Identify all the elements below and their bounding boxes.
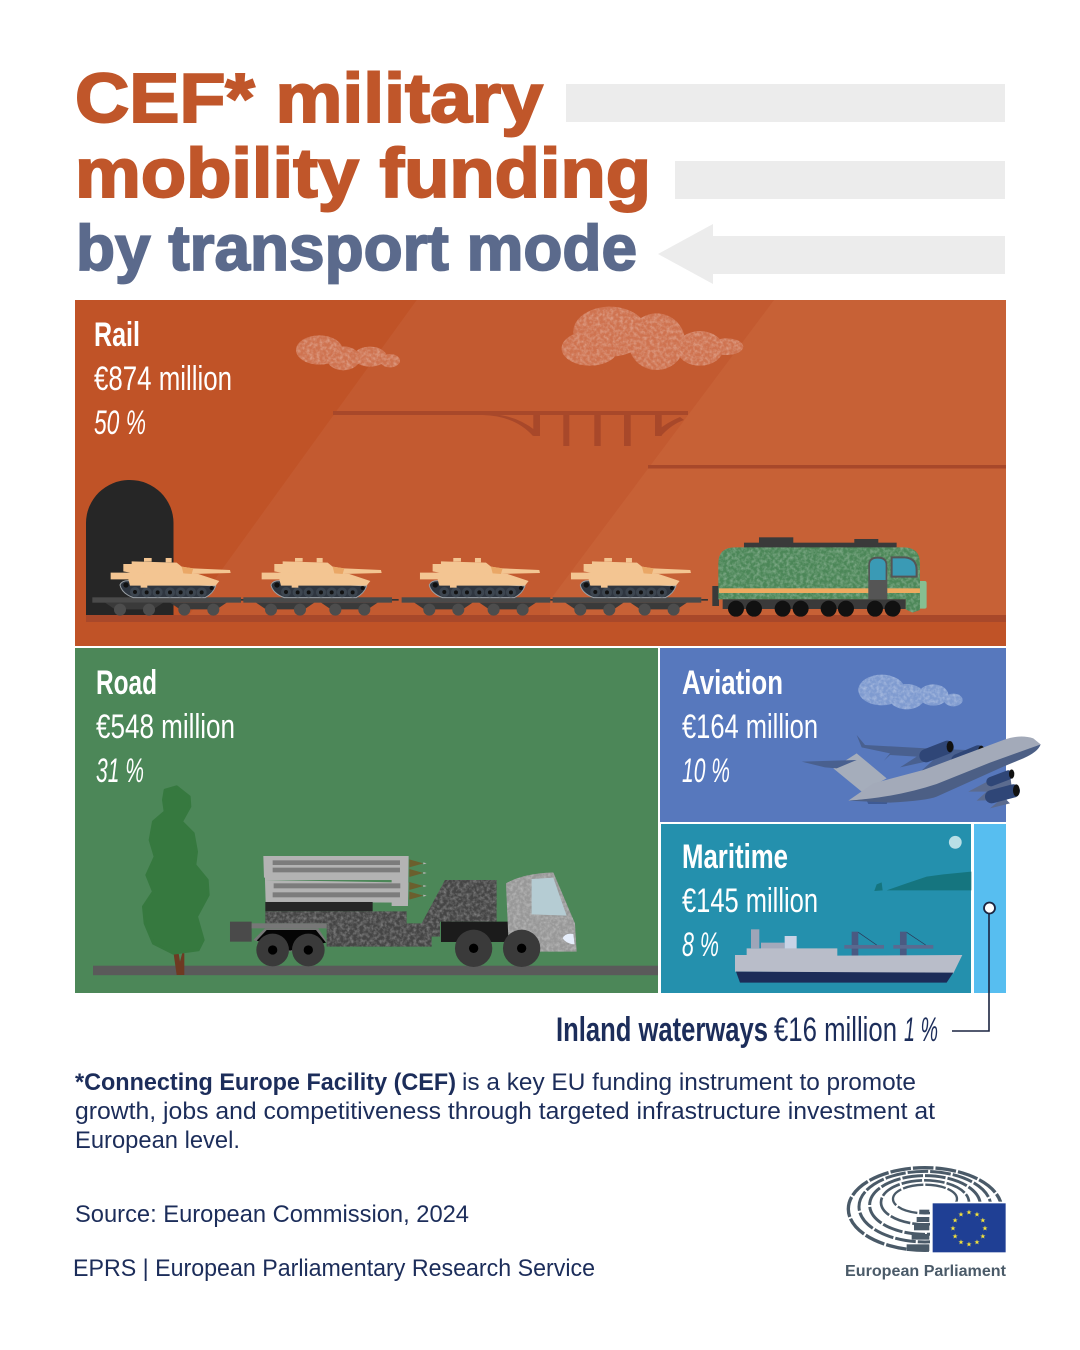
inland share: 1 % — [904, 1011, 938, 1049]
decorative bar 2 — [675, 161, 1005, 199]
tunnel — [86, 480, 174, 615]
road amount: €548 million — [96, 708, 235, 746]
footnote line 2: growth, jobs and competitiveness through targeted infrastructure investment at — [75, 1098, 935, 1125]
decorative bar 1 — [566, 84, 1005, 122]
bridge — [333, 411, 1006, 468]
source line: Source: European Commission, 2024 — [75, 1201, 469, 1228]
rail amount: €874 million — [94, 360, 232, 398]
panel: road — [75, 648, 658, 993]
title line 3: by transport mode — [76, 212, 637, 284]
rail share: 50 % — [94, 404, 146, 442]
road label: Road — [96, 664, 157, 702]
hemicycle and flag — [848, 1168, 1010, 1255]
rocket launcher truck — [230, 856, 577, 967]
inland amount: €16 million — [774, 1011, 897, 1049]
inland label: Inland waterways — [556, 1011, 768, 1049]
credit line: EPRS | European Parliamentary Research Service — [73, 1255, 595, 1282]
title — [75, 59, 651, 284]
title line 1: CEF* military — [75, 59, 543, 137]
aviation cloud — [858, 675, 963, 709]
locomotive — [712, 537, 927, 617]
panel: rail — [75, 300, 1006, 646]
inland waterways caption — [556, 1011, 938, 1049]
island — [874, 872, 971, 891]
rail clouds — [296, 307, 743, 370]
arrow pointing left — [658, 224, 1005, 284]
title line 2: mobility funding — [75, 134, 651, 212]
ground track — [86, 615, 1006, 622]
tree — [143, 787, 208, 975]
moon — [949, 836, 962, 849]
aviation label: Aviation — [682, 664, 783, 702]
cargo ship — [735, 929, 962, 983]
panel: aviation — [660, 648, 1006, 822]
footnote text — [75, 1069, 935, 1154]
logo wordmark: European Parliament — [845, 1263, 1007, 1280]
panel: maritime — [661, 824, 971, 993]
rail label: Rail — [94, 316, 140, 354]
footnote bold lead: *Connecting Europe Facility (CEF) — [75, 1069, 456, 1096]
aviation share: 10 % — [682, 752, 730, 790]
European Parliament logo — [845, 1168, 1010, 1280]
footnote line 1: is a key EU funding instrument to promote — [462, 1069, 916, 1096]
panel: inland waterways — [974, 824, 1006, 993]
road share: 31 % — [96, 752, 144, 790]
airplane — [802, 735, 1041, 808]
road surface — [93, 966, 658, 975]
train of tanks on wagons — [92, 558, 708, 616]
maritime label: Maritime — [682, 838, 788, 876]
maritime amount: €145 million — [682, 882, 818, 920]
inland waterways leader line — [952, 902, 995, 1031]
maritime share: 8 % — [682, 926, 719, 964]
aviation amount: €164 million — [682, 708, 818, 746]
footnote line 3: European level. — [75, 1127, 240, 1154]
